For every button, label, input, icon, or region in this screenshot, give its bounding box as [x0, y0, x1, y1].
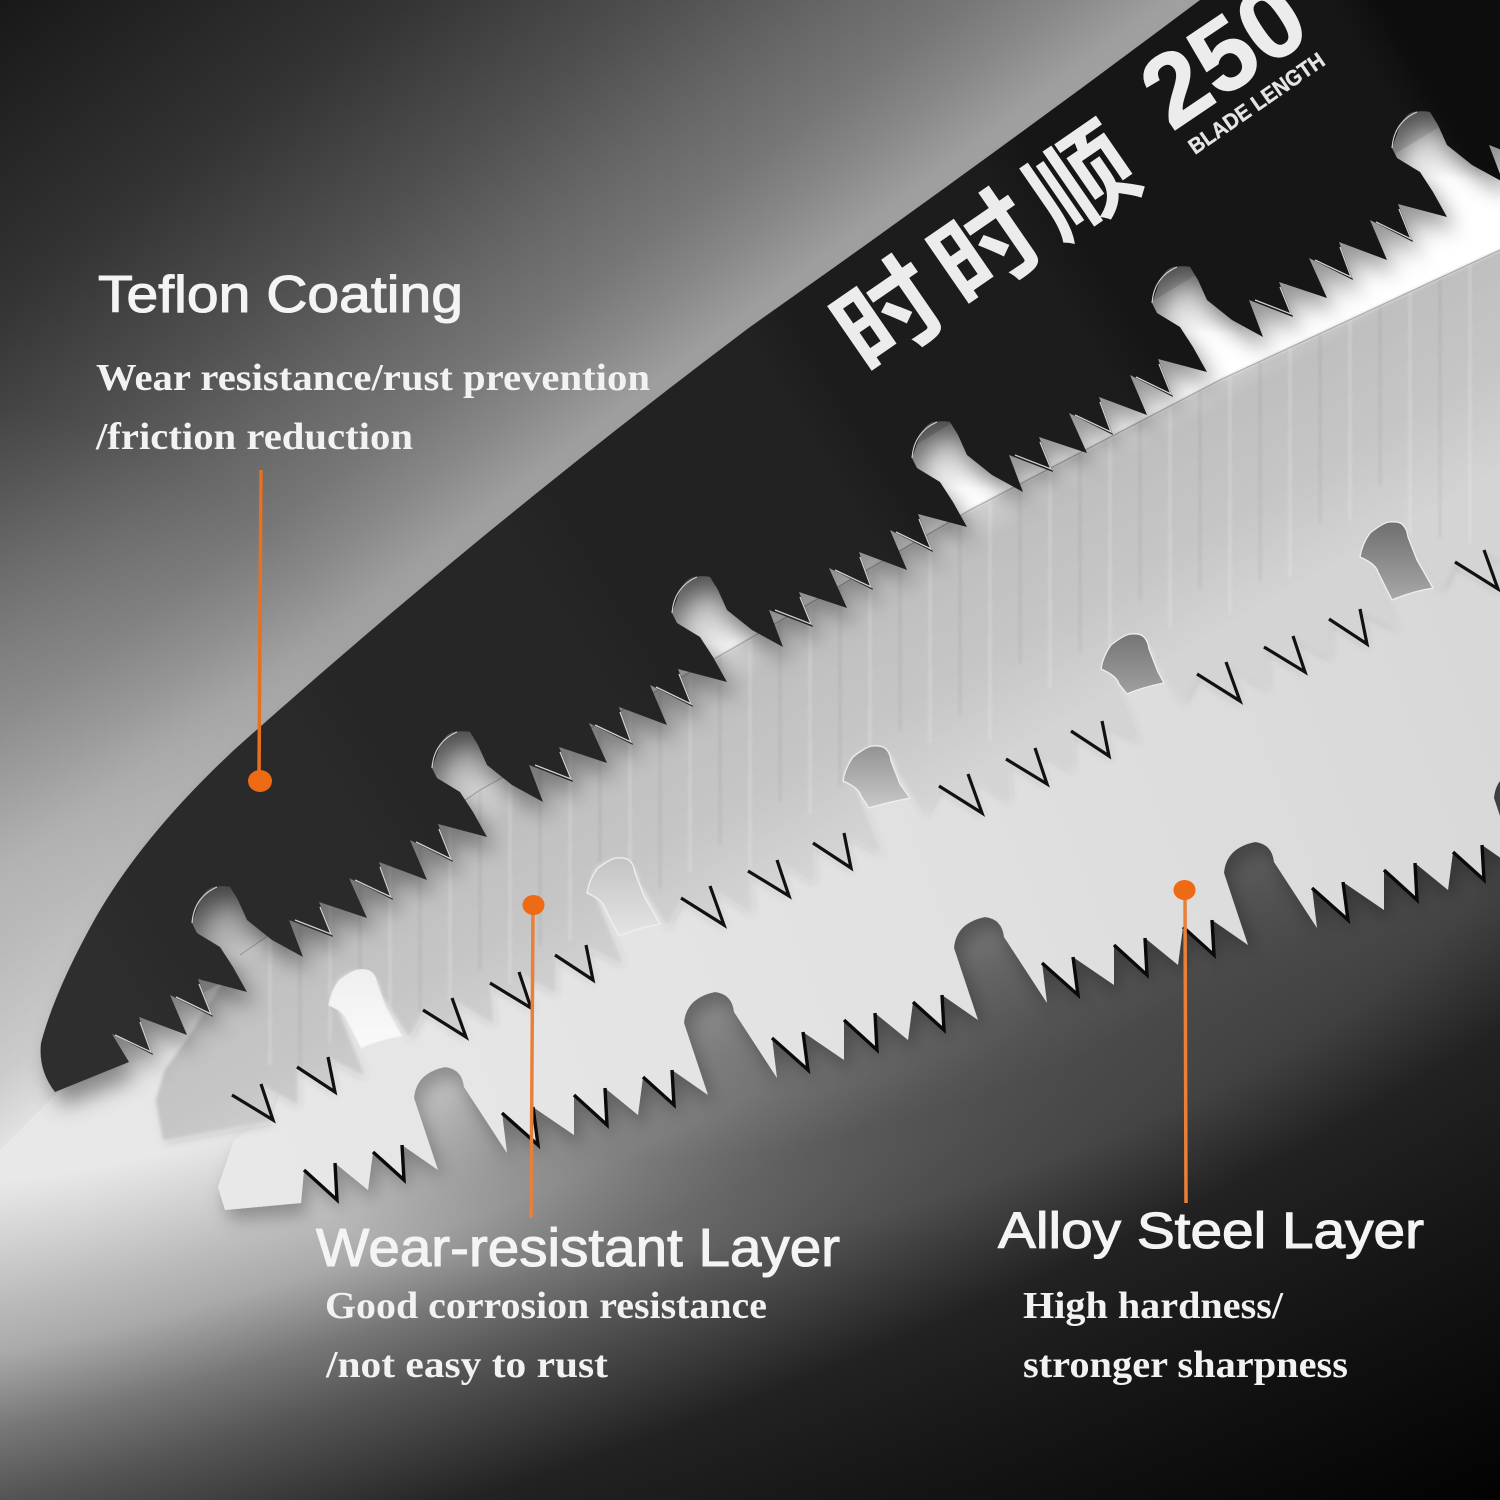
- blade silhouette with teeth: [41, 0, 1500, 1092]
- callout: alloy steel layer pointer: [1174, 880, 1196, 1203]
- text: alloy steel layer description: High hardness/: [1023, 1285, 1283, 1327]
- text: wear-resistant layer description: /not easy to rust: [325, 1344, 608, 1386]
- brushed metal streaks: [270, 264, 1470, 1084]
- gullet shading on bevel band: [183, 107, 1483, 954]
- heading: teflon coating: Teflon Coating: [98, 266, 463, 324]
- teflon coated black blade: [41, 0, 1500, 1092]
- background: shade under blade: [200, 700, 1500, 1320]
- background: lower gradient: [0, 500, 1500, 1500]
- text: teflon coating description: [95, 357, 650, 458]
- text: teflon coating description: Wear resistance/rust prevention: [96, 357, 650, 399]
- heading: wear-resistant layer: Wear-resistant Layer: [316, 1218, 840, 1278]
- alloy steel layer blade: [218, 300, 1500, 1210]
- tooth V marks: [304, 813, 1500, 1200]
- callout: wear-resistant layer pointer: [522, 895, 544, 1218]
- callout: teflon coating pointer: [248, 470, 272, 792]
- bright bevel band behind black blade: [190, 90, 1500, 1000]
- blade length caption: BLADE LENGTH: [1184, 47, 1329, 159]
- wear-resistant layer blade: [156, 150, 1500, 1140]
- text: teflon coating description: /friction reduction: [95, 416, 413, 458]
- gullet rim highlights: [192, 112, 1417, 923]
- tooth V marks: [232, 450, 1500, 1120]
- text: wear-resistant layer description: [325, 1285, 767, 1386]
- background: left glow: [0, 400, 400, 1300]
- tooth highlight marks: [115, 145, 1495, 1052]
- brand name on blade: 时时顺: [814, 98, 1171, 395]
- edge line between bevel and brushed metal: [240, 250, 1500, 955]
- heading: alloy steel layer: Alloy Steel Layer: [998, 1202, 1424, 1259]
- blade silhouette with teeth: [156, 150, 1500, 1140]
- gullet cut-outs: [329, 522, 1433, 1048]
- blade silhouette with teeth: [218, 300, 1500, 1210]
- text: alloy steel layer description: [1023, 1285, 1348, 1386]
- text: alloy steel layer description: stronger sharpness: [1023, 1344, 1348, 1386]
- text: wear-resistant layer description: Good corrosion resistance: [325, 1285, 767, 1327]
